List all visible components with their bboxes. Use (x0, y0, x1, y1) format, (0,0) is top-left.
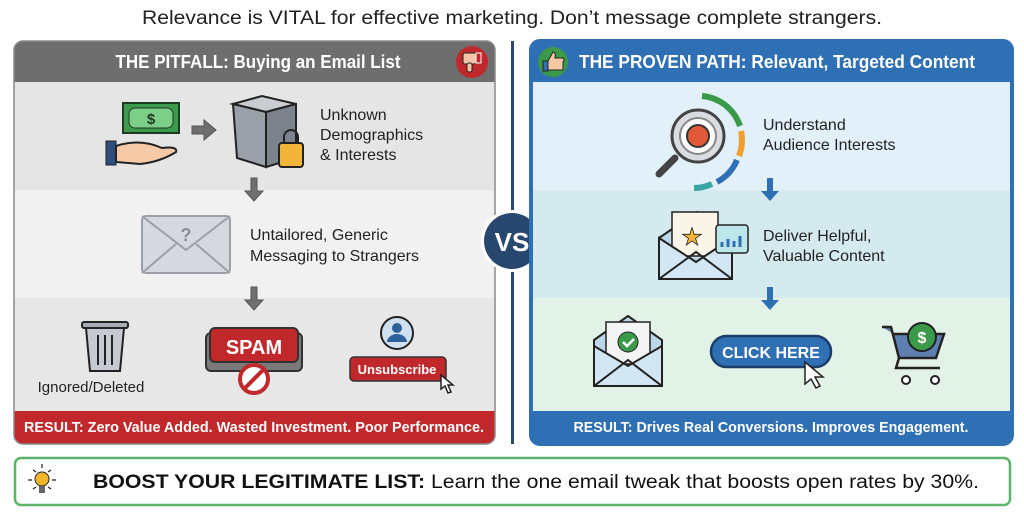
text: boost: BOOST YOUR LEGITIMATE LIST: Learn the one email tweak that boosts open rates by 30%. (93, 472, 979, 493)
icon: cart: $ (918, 330, 927, 347)
icon: envelope question (142, 216, 230, 273)
arrow: right (192, 120, 216, 140)
panel: pitfall (14, 41, 495, 444)
arrow: down blue 2 (761, 287, 779, 310)
result: proven: RESULT: Drives Real Conversions. Improves Engagement. (574, 419, 968, 436)
title: Relevance is VITAL for effective marketing. Don’t message complete strangers. (142, 8, 882, 29)
icon: envelope star (659, 212, 748, 279)
icon: magnifier target (659, 96, 742, 188)
icon: spam: SPAM (226, 337, 282, 359)
icon: thumbs down (456, 46, 488, 78)
text: unknown demographics: Unknown (320, 107, 387, 124)
icon: envelope question: ? (180, 225, 192, 245)
icon: VS circle (481, 210, 543, 272)
icon: cart (882, 323, 944, 384)
text: untailored: Messaging to Strangers (250, 248, 419, 265)
icon: trash (82, 322, 128, 371)
text: unknown demographics: & Interests (320, 147, 396, 164)
icon: locked box (233, 96, 303, 167)
text: understand: Understand (763, 117, 846, 134)
icon: VS circle: VS (495, 227, 529, 257)
icon: envelope check (594, 316, 662, 386)
icon: envelope star: ★ (681, 224, 703, 251)
text: ignored: Ignored/Deleted (38, 379, 144, 396)
icon: spam (206, 328, 302, 393)
heading: pitfall: THE PITFALL: Buying an Email List (116, 52, 400, 72)
icon: money hand: $ (147, 111, 156, 128)
callout: boost list (15, 458, 1010, 505)
icon: lightbulb (28, 464, 56, 493)
text: deliver: Valuable Content (763, 248, 885, 265)
text: unknown demographics: Demographics (320, 127, 423, 144)
heading: proven path: THE PROVEN PATH: Relevant, Targeted Content (579, 52, 975, 72)
arrow: down 1 (245, 178, 263, 201)
icon: unsubscribe: Unsubscribe (358, 362, 436, 377)
text: understand: Audience Interests (763, 137, 896, 154)
divider line (511, 41, 514, 444)
icon: thumbs up (538, 47, 568, 77)
button: click here (711, 336, 831, 388)
icon: unsubscribe (350, 317, 453, 393)
text: untailored: Untailored, Generic (250, 227, 388, 244)
panel: proven path (531, 41, 1012, 444)
button: click here: CLICK HERE (722, 345, 820, 362)
arrow: down 2 (245, 287, 263, 310)
icon: money hand (106, 103, 179, 165)
arrow: down blue 1 (761, 178, 779, 201)
result: pitfall: RESULT: Zero Value Added. Wasted Investment. Poor Performance. (24, 419, 484, 436)
text: deliver: Deliver Helpful, (763, 228, 871, 245)
